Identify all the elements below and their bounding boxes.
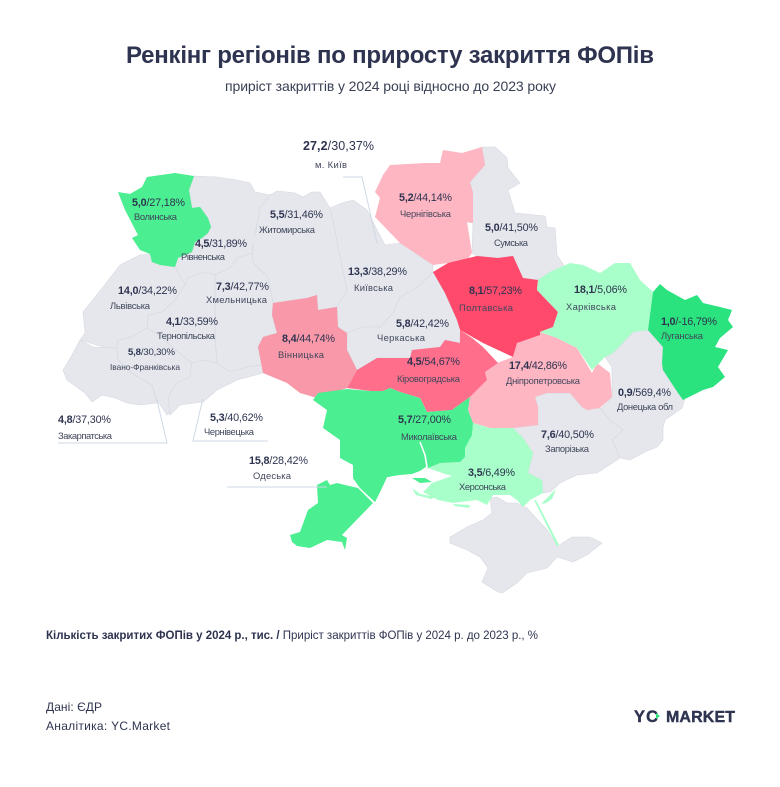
label: Житомирська: 5,5/31,46% bbox=[270, 209, 323, 221]
region: Кіровоградська bbox=[347, 330, 498, 412]
label: м. Київ: м. Київ bbox=[315, 159, 347, 170]
label: Черкаська: 5,8/42,42% bbox=[396, 318, 449, 330]
region: Крим bbox=[450, 497, 602, 593]
label: Черкаська bbox=[377, 318, 449, 343]
river estuary bbox=[412, 442, 427, 475]
label: Львівська: Львівська bbox=[110, 300, 151, 311]
source: data: Дані: ЄДР bbox=[46, 700, 102, 714]
label: Житомирська bbox=[259, 209, 323, 235]
label: Рівненська bbox=[181, 238, 247, 262]
label: Сумська: Сумська bbox=[494, 237, 529, 248]
region: Київська bbox=[330, 200, 433, 333]
region: Тернопільська bbox=[147, 272, 217, 363]
label: Львівська bbox=[110, 285, 177, 311]
region: Вінницька bbox=[258, 295, 357, 398]
label: Донецька: 0,9/569,4% bbox=[618, 387, 671, 399]
label: Київська: Київська bbox=[354, 282, 394, 293]
label: Одеська: Одеська bbox=[253, 470, 292, 481]
label: Львівська: 14,0/34,22% bbox=[118, 285, 177, 297]
label: Закарпатська: Закарпатська bbox=[58, 430, 113, 441]
label: м. Київ bbox=[303, 139, 374, 170]
region: Донецька bbox=[600, 330, 685, 460]
region: Львівська bbox=[80, 254, 185, 348]
label: Івано-Франківська bbox=[110, 347, 180, 372]
label: Тернопільська: 4,1/33,59% bbox=[166, 316, 218, 328]
label: Запорізька bbox=[541, 429, 594, 454]
label: Київська: 13,3/38,29% bbox=[348, 266, 407, 278]
label: Чернівецька: Чернівецька bbox=[204, 426, 255, 437]
region: Дніпропетровська bbox=[468, 332, 612, 428]
region: Волинська bbox=[118, 173, 211, 267]
region: Сумська bbox=[467, 147, 565, 280]
label: Чернігівська: 5,2/44,14% bbox=[399, 192, 452, 204]
label: Вінницька bbox=[278, 333, 335, 360]
label: Херсонська bbox=[459, 467, 515, 492]
label: Хмельницька: Хмельницька bbox=[206, 294, 268, 305]
label: Рівненська: 4,5/31,89% bbox=[195, 238, 247, 250]
label: Чернівецька: 5,3/40,62% bbox=[210, 412, 263, 424]
label: Хмельницька bbox=[206, 281, 269, 305]
source: analytics: Аналітика: YC.Market bbox=[46, 719, 171, 733]
region: Чернігівська bbox=[375, 147, 485, 265]
title: Ренкінг регіонів по приросту закриття ФОПів bbox=[126, 42, 654, 69]
label: Закарпатська: 4,8/37,30% bbox=[58, 414, 111, 426]
label: Волинська bbox=[132, 197, 185, 222]
label: Дніпропетровська: Дніпропетровська bbox=[506, 375, 581, 386]
label: Тернопільська: Тернопільська bbox=[157, 330, 216, 341]
label: Полтавська bbox=[459, 285, 522, 313]
label: м. Київ: 27,2/30,37% bbox=[303, 139, 374, 153]
label: Дніпропетровська: 17,4/42,86% bbox=[509, 360, 567, 372]
label: Запорізька: 7,6/40,50% bbox=[541, 429, 594, 441]
label: Хмельницька: 7,3/42,77% bbox=[216, 281, 269, 293]
label: Київська bbox=[348, 266, 407, 293]
label: Харківська: Харківська bbox=[566, 301, 617, 312]
label: Сумська: 5,0/41,50% bbox=[485, 222, 538, 234]
region labels bbox=[58, 139, 717, 492]
region: Херсонська bbox=[412, 423, 559, 546]
region: Черкаська bbox=[347, 272, 460, 370]
region: Луганська bbox=[648, 284, 733, 400]
label: Кіровоградська: 4,5/54,67% bbox=[407, 356, 460, 368]
region: Рівненська bbox=[175, 176, 270, 285]
label: Чернівецька bbox=[204, 412, 263, 437]
label: Миколаївська: 5,7/27,00% bbox=[398, 414, 451, 426]
region: Івано-Франківська bbox=[117, 328, 192, 415]
region: Запорізька bbox=[513, 393, 623, 493]
label: Тернопільська bbox=[157, 316, 218, 341]
label: Волинська: Волинська bbox=[134, 211, 178, 222]
label: Одеська bbox=[249, 455, 308, 481]
label: Івано-Франківська: 5,8/30,30% bbox=[128, 347, 175, 358]
region: Миколаївська bbox=[353, 388, 473, 502]
region: Полтавська bbox=[433, 256, 558, 357]
label: Харківська bbox=[566, 284, 627, 312]
label: Херсонська: Херсонська bbox=[459, 481, 507, 492]
region: Житомирська bbox=[252, 191, 347, 310]
label: Донецька bbox=[617, 387, 673, 412]
label: Сумська bbox=[485, 222, 538, 248]
label: Кіровоградська bbox=[397, 356, 461, 384]
label: Волинська: 5,0/27,18% bbox=[132, 197, 185, 209]
label: Чернігівська: Чернігівська bbox=[400, 208, 452, 219]
label: Миколаївська: Миколаївська bbox=[401, 431, 458, 442]
logo: YC Market: MARKET bbox=[666, 709, 735, 726]
label: Чернігівська bbox=[399, 192, 452, 219]
callout lines bbox=[58, 177, 377, 487]
label: Закарпатська bbox=[58, 414, 113, 441]
label: Черкаська: Черкаська bbox=[377, 332, 426, 343]
label: Херсонська: 3,5/6,49% bbox=[468, 467, 515, 479]
label: Миколаївська bbox=[398, 414, 458, 442]
label: Івано-Франківська: Івано-Франківська bbox=[110, 362, 180, 372]
logo: YC Market: YC bbox=[634, 708, 658, 726]
label: Вінницька: Вінницька bbox=[278, 349, 325, 360]
label: Одеська: 15,8/28,42% bbox=[249, 455, 308, 467]
label: Полтавська: 8,1/57,23% bbox=[469, 285, 522, 297]
region: Закарпатська bbox=[63, 340, 157, 405]
region: Харківська bbox=[537, 263, 653, 370]
label: Рівненська: Рівненська bbox=[181, 251, 226, 262]
region: Хмельницька bbox=[215, 253, 277, 372]
label: Луганська bbox=[661, 316, 717, 341]
label: Запорізька: Запорізька bbox=[545, 443, 590, 454]
label: Донецька: Донецька обл bbox=[617, 401, 673, 412]
label: Полтавська: Полтавська bbox=[459, 302, 514, 313]
region: Одеська bbox=[290, 389, 395, 550]
label: Кіровоградська: Кіровоградська bbox=[397, 373, 461, 384]
legend note: Кількість закритих ФОПів у 2024 р., тис. / Приріст закриттів ФОПів у 2024 р. до 2023 р., % bbox=[46, 630, 538, 642]
label: Харківська: 18,1/5,06% bbox=[574, 284, 627, 296]
logo: YC Market bbox=[634, 708, 735, 726]
grey regions bbox=[63, 147, 685, 593]
label: Луганська: Луганська bbox=[661, 330, 704, 341]
subtitle: приріст закриттів у 2024 році відносно до 2023 року bbox=[225, 78, 556, 94]
region: Чернівецька bbox=[168, 360, 263, 415]
label: Вінницька: 8,4/44,74% bbox=[282, 333, 335, 345]
map of Ukraine bbox=[63, 147, 733, 593]
label: Дніпропетровська bbox=[506, 360, 581, 386]
label: Луганська: 1,0/-16,79% bbox=[661, 316, 717, 328]
label: Житомирська: Житомирська bbox=[259, 224, 316, 235]
